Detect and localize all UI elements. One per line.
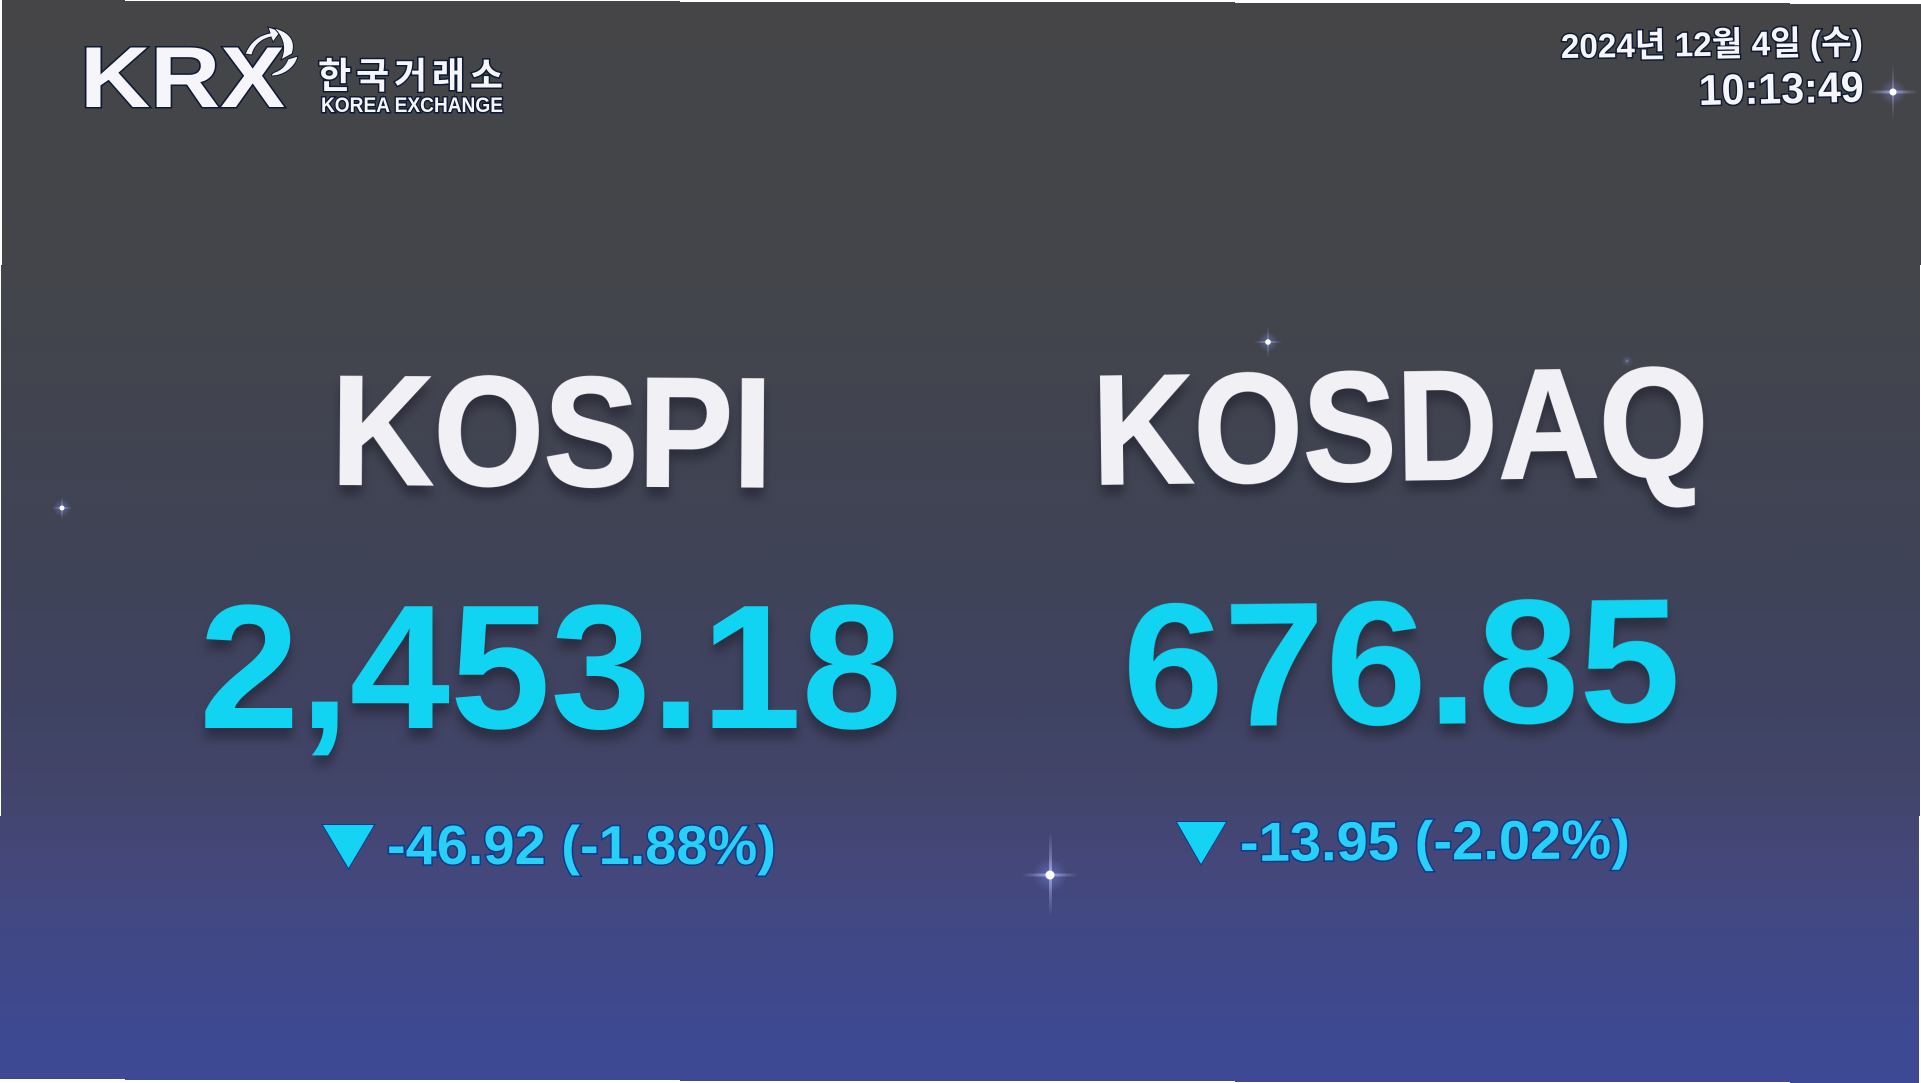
KOSDAQ index value: 676.85: [1121, 561, 1681, 765]
KOSDAQ change: -13.95 (-2.02%): [1240, 808, 1630, 873]
KOSPI down triangle: [323, 825, 374, 868]
logo Korean name: 한국거래소: [318, 55, 503, 96]
date: 2024년 12월 4일 (수): [1561, 24, 1863, 66]
panel: KOSPI: [199, 344, 902, 876]
logo swoosh: [245, 27, 298, 76]
logo wordmark KRX: KRX: [80, 30, 285, 126]
logo English name: KOREA EXCHANGE: [321, 94, 503, 117]
KOSPI heading: KOSPI: [331, 344, 773, 521]
sparkle: above KOSDAQ: [1254, 326, 1282, 358]
sparkle: left: [52, 496, 72, 520]
KOSPI index value: 2,453.18: [199, 568, 902, 766]
sparkle: bottom centre: [1022, 832, 1078, 916]
KOSDAQ down triangle: [1177, 822, 1226, 864]
sparkle: faint above Q: [1621, 355, 1633, 367]
panel: KOSDAQ: [1091, 335, 1709, 873]
time: 10:13:49: [1698, 64, 1864, 115]
KOSDAQ heading: KOSDAQ: [1091, 335, 1709, 518]
KOSPI change: -46.92 (-1.88%): [387, 814, 776, 876]
sparkle: top right: [1868, 64, 1918, 120]
logo: KRX Korea Exchange: [80, 27, 503, 126]
